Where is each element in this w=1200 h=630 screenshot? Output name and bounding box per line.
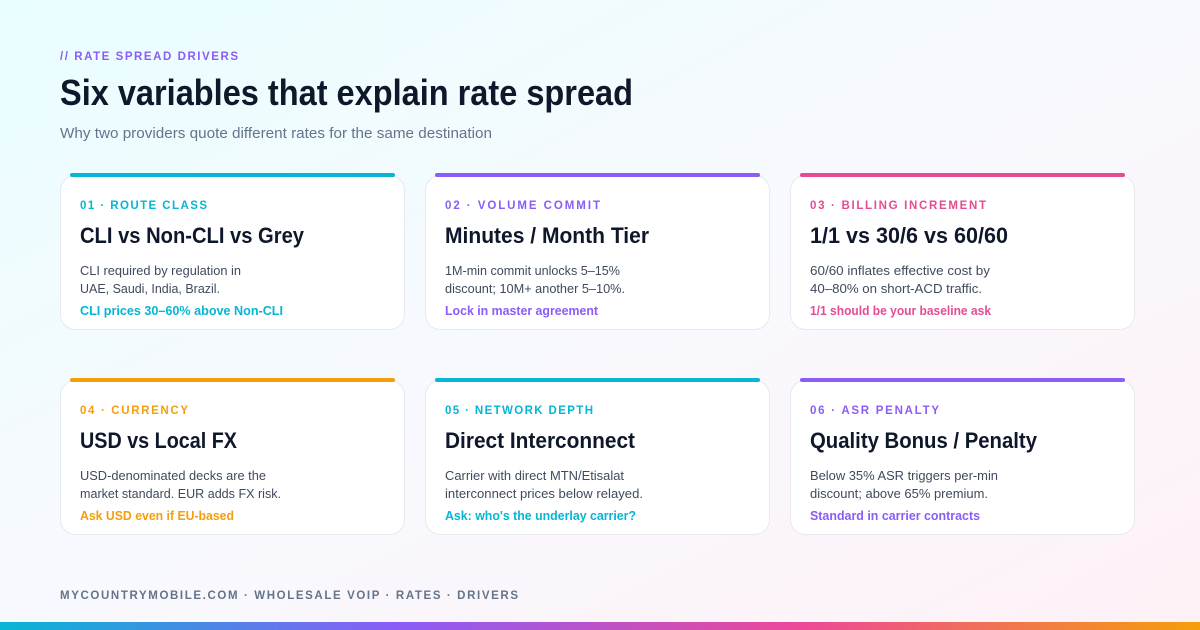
body 05: Carrier with direct MTN/Etisalat [445, 468, 624, 483]
heading 04: USD vs Local FX [80, 428, 237, 453]
gradient bar [0, 622, 1200, 630]
body 06 [810, 468, 998, 501]
takeaway 06: Standard in carrier contracts [810, 508, 980, 523]
body 02: discount; 10M+ another 5–10%. [445, 281, 625, 296]
label 03: 03 · BILLING INCREMENT [810, 200, 986, 212]
body 01: UAE, Saudi, India, Brazil. [80, 281, 220, 296]
footer: MYCOUNTRYMOBILE.COM · WHOLESALE VOIP · RATES · DRIVERS [60, 590, 518, 602]
body 04: market standard. EUR adds FX risk. [80, 486, 281, 501]
takeaway 05: Ask: who's the underlay carrier? [445, 508, 636, 523]
panel: 02 volume commit [426, 173, 770, 330]
heading 03: 1/1 vs 30/6 vs 60/60 [810, 223, 1008, 248]
subtitle: Why two providers quote different rates for the same destination [60, 125, 492, 142]
heading 02: Minutes / Month Tier [445, 223, 649, 248]
heading 06: Quality Bonus / Penalty [810, 428, 1038, 453]
takeaway 01: CLI prices 30–60% above Non-CLI [80, 303, 283, 318]
panel: 06 asr penalty [790, 378, 1134, 534]
label 01: 01 · ROUTE CLASS [80, 200, 207, 212]
body 06: discount; above 65% premium. [810, 486, 988, 501]
heading 05: Direct Interconnect [445, 428, 636, 453]
panel: 03 billing increment [790, 173, 1134, 330]
takeaway 03: 1/1 should be your baseline ask [810, 303, 992, 318]
body 04: USD-denominated decks are the [80, 468, 266, 483]
eyebrow: // RATE SPREAD DRIVERS [60, 51, 238, 63]
title: Six variables that explain rate spread [60, 72, 633, 113]
body 01 [80, 263, 241, 296]
takeaway 04: Ask USD even if EU-based [80, 508, 234, 523]
label 06: 06 · ASR PENALTY [810, 405, 939, 417]
body 02: 1M-min commit unlocks 5–15% [445, 263, 620, 278]
body 06: Below 35% ASR triggers per-min [810, 468, 998, 483]
body 05 [445, 468, 643, 501]
body 05: interconnect prices below relayed. [445, 486, 643, 501]
panel: 01 route class [60, 173, 404, 330]
body 01: CLI required by regulation in [80, 263, 241, 278]
body 04 [80, 468, 281, 501]
body 03: 60/60 inflates effective cost by [810, 263, 991, 278]
takeaway 02: Lock in master agreement [445, 303, 599, 318]
panel: 05 network depth [426, 378, 770, 534]
heading 01: CLI vs Non-CLI vs Grey [80, 223, 305, 248]
body 03 [810, 263, 991, 296]
body 03: 40–80% on short-ACD traffic. [810, 281, 982, 296]
body 02 [445, 263, 625, 296]
panel: 04 currency [60, 378, 404, 534]
label 04: 04 · CURRENCY [80, 405, 188, 417]
label 02: 02 · VOLUME COMMIT [445, 200, 600, 212]
label 05: 05 · NETWORK DEPTH [445, 405, 593, 417]
